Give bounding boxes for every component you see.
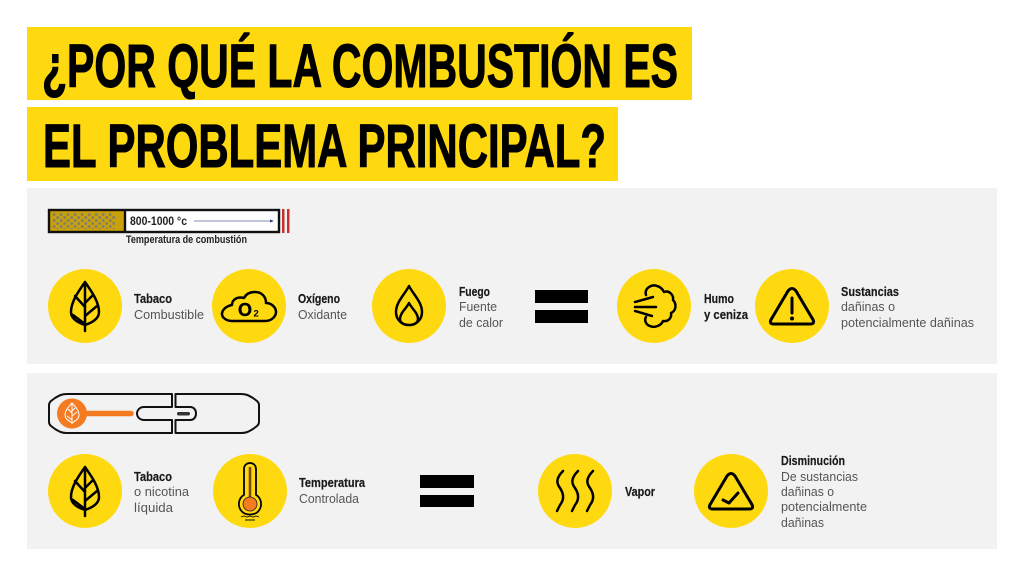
text: tabaco combustible: Tabaco [134,291,172,306]
text: sustancias [841,284,974,330]
icon: warning triangle [755,269,829,343]
text: temperatura controlada [299,475,366,506]
icon: vapor waves [538,454,612,528]
text: disminucion: potencialmente [781,500,867,514]
text: fuego: de calor [459,316,503,330]
icon: flame [372,269,446,343]
text: vapor: Vapor [625,484,655,499]
icon: leaf [48,269,122,343]
cigarette temperature diagram: Temperatura de combustión [126,234,247,246]
text: temperatura controlada: Temperatura [299,475,366,490]
text: humo y ceniza: y ceniza [704,307,749,322]
text: oxigeno: Oxidante [298,308,347,322]
cigarette temperature diagram: 800-1000 °c [130,216,188,228]
icon: thermometer [213,454,287,528]
icon: oxygen cloud: 2 [254,308,259,320]
panel: combustion [27,188,997,364]
text: sustancias: dañinas o [841,300,895,314]
icon: triangle with check [694,454,768,528]
icon: oxygen cloud: O [238,300,252,320]
title [27,27,692,181]
text: oxigeno [298,291,347,322]
equals sign [535,290,588,323]
text: fuego [459,284,503,330]
title: ¿POR QUÉ LA COMBUSTIÓN ES [42,32,678,100]
text: tabaco o nicotina: Tabaco [134,469,172,484]
text: humo y ceniza: Humo [704,291,734,306]
text: tabaco o nicotina [134,469,189,515]
text: tabaco o nicotina: o nicotina [134,485,189,499]
text: sustancias: Sustancias [841,284,899,299]
text: disminucion: dañinas [781,516,824,530]
text: temperatura controlada: Controlada [299,492,359,506]
text: disminucion: Disminución [781,453,845,468]
text: fuego: Fuente [459,300,497,314]
text: tabaco combustible [134,291,204,322]
text: disminucion [781,453,867,530]
text: disminucion: De sustancias [781,470,858,484]
cigarette temperature diagram [49,209,290,246]
icon: oxygen cloud [212,269,286,343]
text: disminucion: dañinas o [781,485,834,499]
text: sustancias: potencialmente dañinas [841,316,974,330]
text: oxigeno: Oxígeno [298,291,340,306]
title: EL PROBLEMA PRINCIPAL? [43,112,606,180]
text: humo y ceniza [704,291,749,322]
icon: smoke puff [617,269,691,343]
text: tabaco o nicotina: líquida [134,501,173,515]
panel: heated product [27,373,997,549]
heated device diagram [49,394,259,433]
text: fuego: Fuego [459,284,490,299]
icon: leaf [48,454,122,528]
equals sign [420,475,474,507]
text: tabaco combustible: Combustible [134,308,204,322]
